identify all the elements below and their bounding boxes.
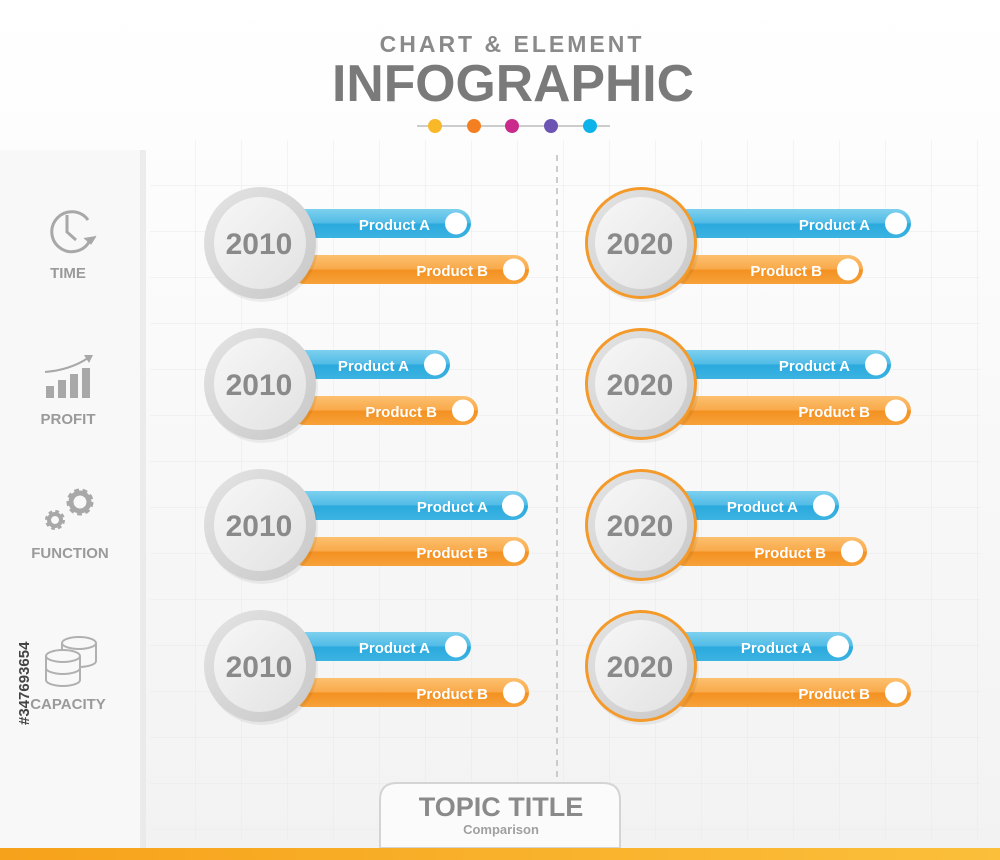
row 2 right: Product A [779, 358, 850, 375]
row 3 left: Product B [416, 545, 488, 562]
topic title box [380, 783, 620, 848]
row 4 right: Product A [741, 640, 812, 657]
icon: gears [48, 492, 90, 527]
topic title box: TOPIC TITLE [419, 792, 583, 822]
row 2 left: Product A [338, 358, 409, 375]
title: CHART & ELEMENT [380, 31, 644, 57]
row 1 left: 2010 [226, 228, 292, 261]
label: function: FUNCTION [31, 545, 109, 562]
panel: sidebar [0, 150, 146, 850]
row 4 right [585, 610, 911, 725]
label: profit: PROFIT [40, 411, 96, 428]
topic title box: Comparison [463, 822, 539, 837]
row 2 left: Product B [365, 404, 437, 421]
row 1 right: Product A [799, 217, 870, 234]
row 3 right: 2020 [607, 510, 673, 543]
icon: profit [45, 355, 93, 398]
row 3 left: 2010 [226, 510, 292, 543]
row 1 right: 2020 [607, 228, 673, 261]
row 3 right: Product A [727, 499, 798, 516]
row 2 right: Product B [798, 404, 870, 421]
row 1 right [585, 187, 911, 302]
row 2 right: 2020 [607, 369, 673, 402]
row 3 left: Product A [417, 499, 488, 516]
row 1 left: Product B [416, 263, 488, 280]
label: time: TIME [50, 265, 86, 282]
row 4 right: 2020 [607, 651, 673, 684]
row 4 right: Product B [798, 686, 870, 703]
row 4 left: Product B [416, 686, 488, 703]
row 4 left [204, 610, 529, 725]
divider [556, 155, 558, 780]
row 1 left: Product A [359, 217, 430, 234]
stock id: #347693654 [16, 641, 33, 725]
row 1 right: Product B [750, 263, 822, 280]
bottom bar [0, 848, 1000, 860]
row 1 left [204, 187, 529, 302]
title: INFOGRAPHIC [332, 55, 694, 113]
label: capacity: CAPACITY [30, 696, 106, 713]
row 2 left [204, 328, 478, 443]
icon: capacity [46, 637, 96, 686]
row 2 left: 2010 [226, 369, 292, 402]
row 2 right [585, 328, 911, 443]
row 3 right [585, 469, 867, 584]
row 3 left [204, 469, 529, 584]
icon: time [52, 212, 96, 252]
row 4 left: 2010 [226, 651, 292, 684]
color dots [417, 119, 610, 133]
row 3 right: Product B [754, 545, 826, 562]
row 4 left: Product A [359, 640, 430, 657]
